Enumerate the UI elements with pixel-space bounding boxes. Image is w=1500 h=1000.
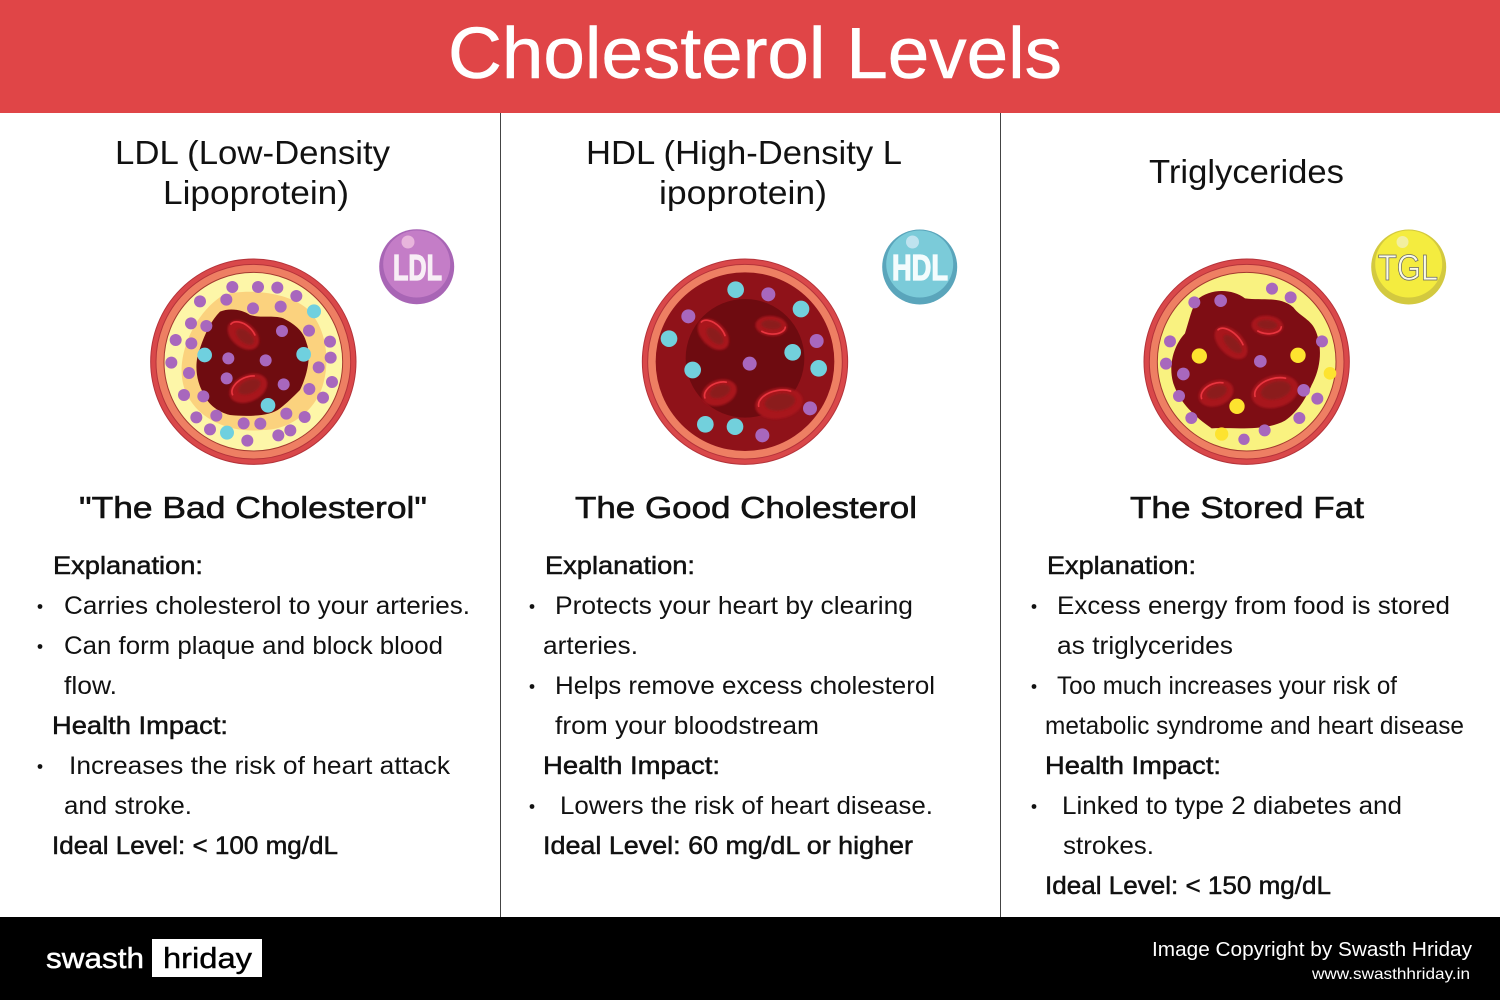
text block: triglyceride details: as triglycerides (1057, 632, 1233, 660)
footer bar (0, 917, 1500, 1000)
text block: triglyceride details: metabolic syndrome and heart disease (1045, 712, 1464, 740)
icon: TGL artery cross-section (1144, 259, 1349, 464)
panel: HDL (530, 134, 957, 860)
text block: HDL details: from your bloodstream (555, 712, 819, 740)
copyright text: www.swasthhriday.in (1311, 966, 1470, 983)
title: Cholesterol Levels (448, 14, 1062, 94)
subheading: stored fat: The Stored Fat (1130, 490, 1364, 525)
text block: triglyceride details (1032, 552, 1464, 900)
text block: triglyceride details: Explanation: (1047, 552, 1196, 580)
text block: triglyceride details: Linked to type 2 diabetes and (1062, 792, 1402, 820)
text block: HDL details: Health Impact: (543, 752, 720, 780)
icon: HDL badge: HDL (892, 247, 948, 288)
subheading: good cholesterol: The Good Cholesterol (575, 490, 917, 525)
text block: HDL details (530, 552, 935, 860)
panel: Triglycerides (1032, 153, 1464, 900)
text block: triglyceride details: Excess energy from food is stored (1057, 592, 1450, 620)
text block: HDL details: Lowers the risk of heart disease. (560, 792, 933, 820)
text block: LDL details: Ideal Level: < 100 mg/dL (52, 832, 338, 860)
text block: LDL details: Carries cholesterol to your arteries. (64, 592, 470, 620)
heading: Triglycerides: Triglycerides (1149, 153, 1344, 190)
header banner (0, 0, 1500, 113)
heading: HDL (586, 134, 902, 211)
logo: swasth (46, 943, 144, 975)
text block: LDL details: Can form plaque and block blood (64, 632, 443, 660)
text block: HDL details: Protects your heart by clearing (555, 592, 913, 620)
subheading: bad cholesterol: "The Bad Cholesterol" (79, 490, 427, 525)
icon: HDL artery cross-section (642, 259, 848, 464)
text block: HDL details: Ideal Level: 60 mg/dL or higher (543, 832, 913, 860)
text block: LDL details: Increases the risk of heart attack (69, 752, 451, 780)
text block: LDL details: Explanation: (53, 552, 203, 580)
text block: LDL details: Health Impact: (52, 712, 228, 740)
heading: HDL: ipoprotein) (659, 174, 827, 211)
text block: triglyceride details: Ideal Level: < 150 mg/dL (1045, 872, 1331, 900)
icon: HDL badge (882, 230, 957, 304)
heading: LDL: LDL (Low-Density (115, 134, 391, 171)
heading: LDL: Lipoprotein) (163, 174, 349, 211)
text block: LDL details: flow. (64, 672, 117, 700)
panel: LDL (38, 134, 470, 860)
icon: TGL badge: TGL (1378, 247, 1438, 288)
heading: HDL: HDL (High-Density L (586, 134, 902, 171)
text block: LDL details: and stroke. (64, 792, 192, 820)
text block: triglyceride details: Health Impact: (1045, 752, 1221, 780)
heading: LDL (115, 134, 391, 211)
text block: triglyceride details: strokes. (1063, 832, 1154, 860)
icon: LDL badge (379, 229, 454, 304)
icon: LDL artery cross-section (151, 259, 356, 464)
text block: HDL details: Helps remove excess cholesterol (555, 672, 935, 700)
text block: triglyceride details: Too much increases your risk of (1057, 672, 1397, 700)
text block: HDL details: arteries. (543, 632, 638, 660)
text block: HDL details: Explanation: (545, 552, 695, 580)
copyright text: Image Copyright by Swasth Hriday (1152, 939, 1472, 961)
logo (46, 939, 262, 977)
icon: LDL badge: LDL (393, 247, 442, 288)
text block: LDL details (38, 552, 470, 860)
logo: hriday (163, 943, 253, 975)
copyright text (1152, 939, 1472, 983)
icon: TGL badge (1371, 230, 1446, 304)
